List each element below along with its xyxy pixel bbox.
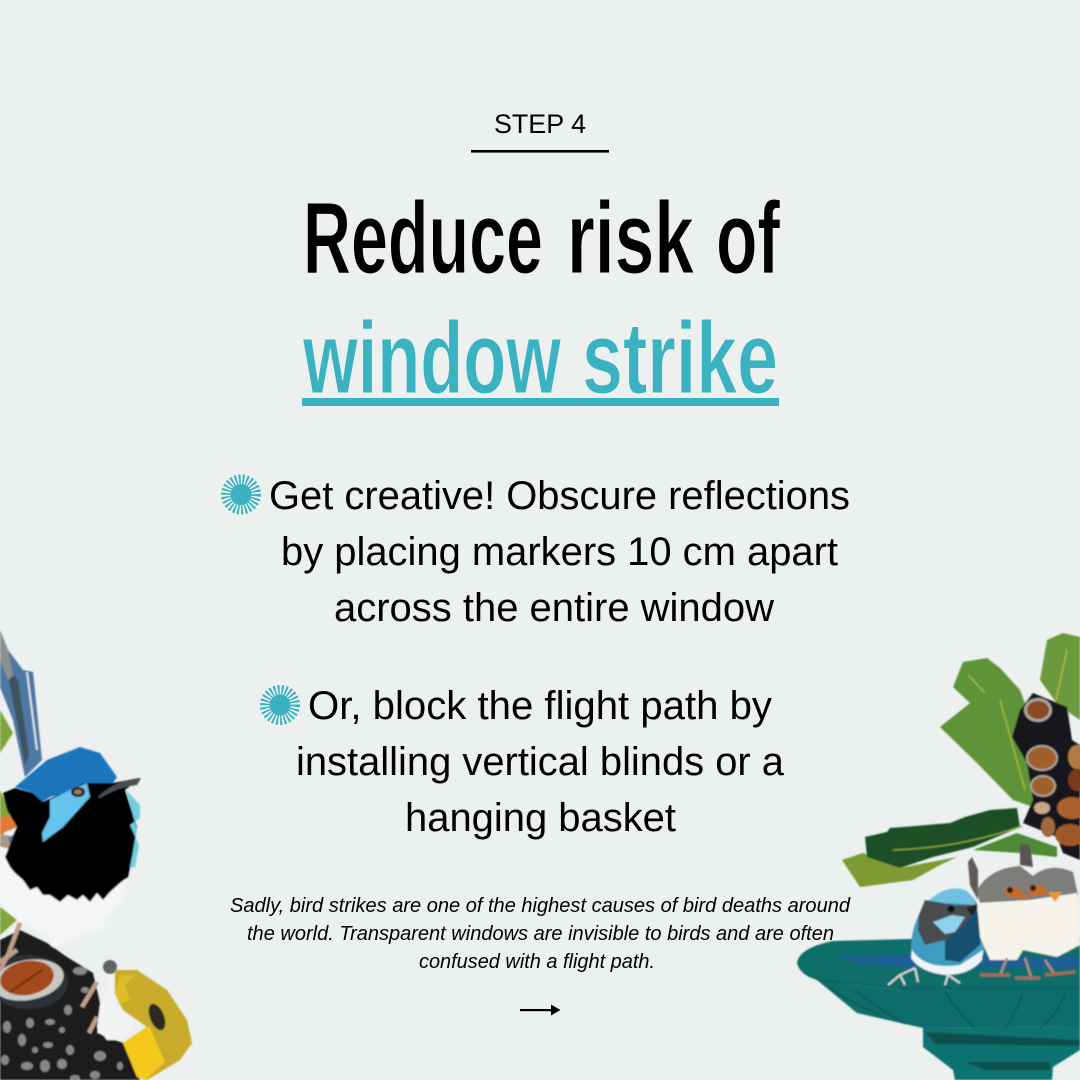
yellow banksia flower [115,970,192,1080]
eye [71,787,85,797]
icon: teal starburst bullet [266,691,294,719]
tail feathers [0,630,42,777]
tip 1: obscure reflections: Get creative! Obscure reflections [269,474,850,518]
tip 2: block the flight path: hanging basket [405,796,676,840]
bird bath rim [797,938,1080,990]
wren legs [0,923,20,970]
footnote: Sadly, bird strikes are one of the highest causes of bird deaths around [230,894,851,917]
seed pod [0,954,68,1009]
orange wing patch [0,815,20,834]
title: strike [582,301,778,415]
footnote: confused with a flight path. [419,950,655,973]
blue cap [15,747,117,802]
white belly [0,847,128,948]
banksia leaf upper right [1040,633,1080,720]
fluffy white fledglings [968,857,1080,980]
arrow [520,1004,560,1016]
cyan edge of throat [126,790,140,868]
grey speckles on cone [1,967,123,1080]
step label: STEP 4 [494,109,586,139]
illustration: blue wren on banksia (left) [0,630,192,1080]
banksia seed pods [1024,698,1080,846]
title [302,181,781,415]
banksia leaf large green [940,658,1035,807]
water [833,955,1080,968]
tip 1: obscure reflections [227,474,850,630]
tip 2: block the flight path [266,684,785,840]
tip 1: obscure reflections: across the entire window [334,586,774,630]
black head [3,778,140,902]
bird bath bowl [817,980,1080,1028]
title: window [302,301,561,415]
green leaves behind bird [0,710,17,935]
twig [1020,843,1033,867]
footnote [230,894,851,973]
olive leaf [842,853,957,887]
lower leaf pale [973,833,1057,857]
illustration: birds on bird bath with banksia (right) [797,633,1080,1080]
footnote: the world. Transparent windows are invisible to birds and are often [247,922,834,945]
banksia cone [1012,693,1080,860]
dark serrated leaf [865,808,1020,868]
step label [471,109,609,153]
title: risk [567,181,694,295]
icon: teal starburst bullet [227,480,255,508]
title: of [716,181,781,295]
white flower stem [97,970,133,1040]
tip 2: block the flight path: installing vertical blinds or a [296,740,785,784]
bird bath foot [923,1027,1080,1080]
title: Reduce [303,181,543,295]
blue wren [888,888,985,985]
beak [98,778,141,798]
light blue face patch [42,783,90,842]
banksia cone body [0,930,140,1080]
tip 2: block the flight path: Or, block the flight path by [308,684,772,728]
bird bath ribs [817,980,1080,988]
tip 1: obscure reflections: by placing markers 10 cm apart [281,530,838,574]
